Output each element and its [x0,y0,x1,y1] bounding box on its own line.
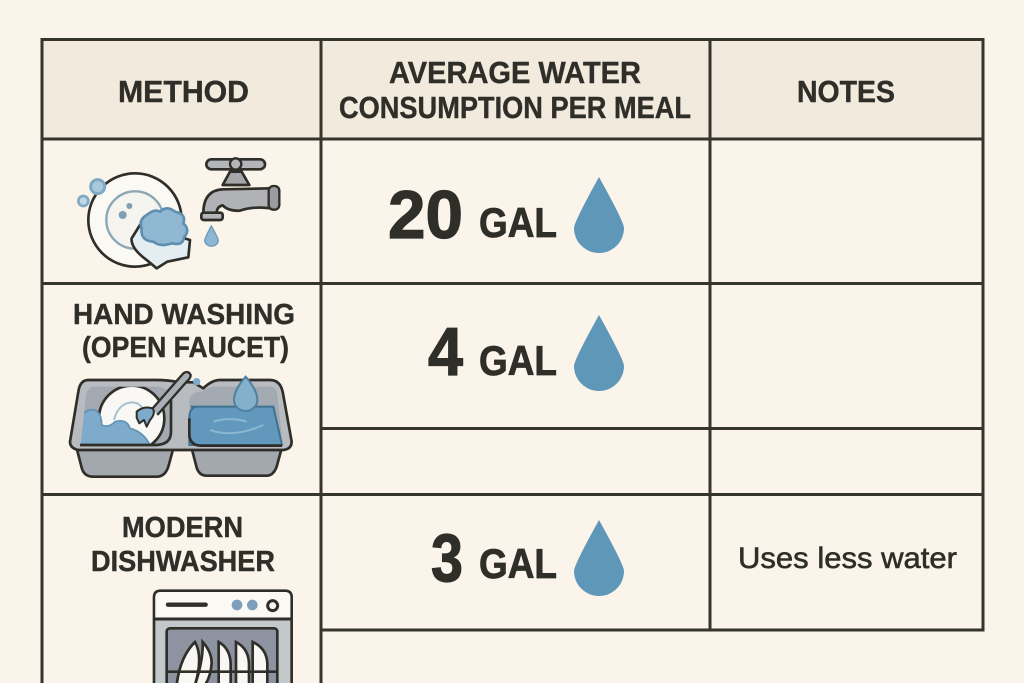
note: uses less water: Uses less water [738,542,957,575]
value: 4 gal: 4 [428,314,463,390]
icon: water drop 2 [574,315,624,391]
value: 20 gal: 20 [388,177,463,253]
label: hand washing (open faucet) [73,299,295,364]
heading: average water consumption per meal [339,55,691,125]
value: 20 gal [388,177,557,253]
icon: dishwasher [154,591,292,683]
label: hand washing (open faucet): (OPEN FAUCET) [82,332,289,364]
icon: water drop 3 [574,520,624,596]
icon: double sink with dishes and water [70,372,292,477]
icon: water drop 1 [574,177,624,253]
heading: average water consumption per meal: AVERAGE WATER [389,55,641,90]
heading: method: METHOD [118,74,249,109]
value: 3 gal [431,520,557,596]
icon: plate with sponge and dripping faucet [78,158,279,268]
heading: notes: NOTES [797,74,895,109]
heading: average water consumption per meal: CONSUMPTION PER MEAL [339,90,691,125]
label: modern dishwasher: MODERN [122,512,243,544]
label: modern dishwasher: DISHWASHER [91,546,275,578]
label: hand washing (open faucet): HAND WASHING [73,299,295,331]
value: 4 gal: GAL [479,337,557,384]
value: 4 gal [428,314,557,390]
label: modern dishwasher [91,512,275,578]
value: 20 gal: GAL [479,199,557,246]
value: 3 gal: 3 [431,520,463,596]
header row background [42,40,983,139]
value: 3 gal: GAL [479,540,557,587]
